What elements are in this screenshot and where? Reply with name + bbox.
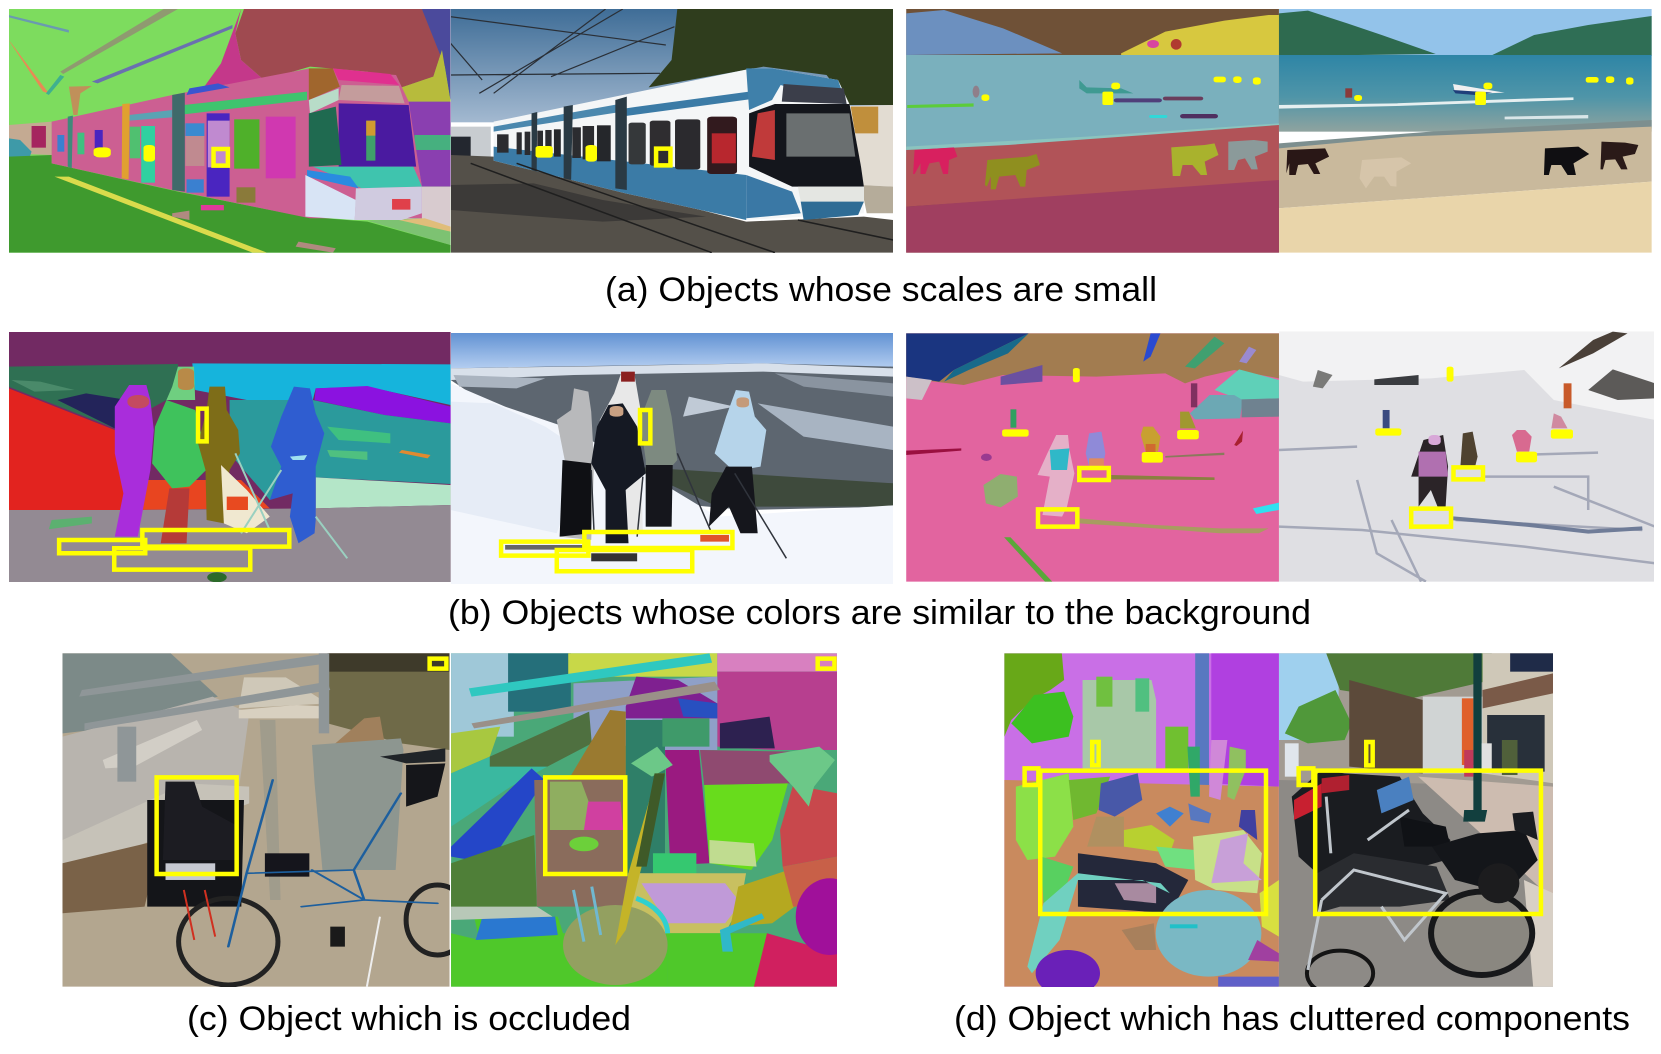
segmentation map: beach [906,9,1279,253]
photo: skiers on snowy slope [1279,332,1655,582]
panel: (b) objects whose colors are similar to the background [9,332,1655,632]
caption (a): (a) Objects whose scales are small [605,271,1157,309]
yellow marker boxes: small objects [94,76,1633,166]
segmentation map: skiers on ridge [9,332,451,582]
segmentation map: bicycle scene [451,653,864,987]
caption (d): (d) Object which has cluttered components [954,1000,1630,1038]
segmentation map: ski slope [906,333,1279,582]
yellow marker boxes: cluttered motorcycles [1025,742,1541,914]
caption (c): (c) Object which is occluded [187,1000,631,1038]
photo: beach with cows [1279,9,1652,253]
panel: (c) object which is occluded [62,653,864,1038]
segmentation map: tram [9,9,451,253]
photo: skiers on mountain top [451,332,893,584]
panel: (d) object which has cluttered components [954,653,1630,1038]
caption (b): (b) Objects whose colors are similar to the background [448,594,1311,632]
yellow marker boxes: low-contrast skis [59,367,1573,571]
photo: motorcycles on street [1279,653,1553,996]
photo: dog in bicycle basket [62,653,469,987]
segmentation map: motorcycles on street [1004,653,1279,997]
yellow marker boxes: occluded dog [157,659,834,874]
photo: blue and white tram [451,9,893,253]
panel: (a) objects whose scales are small [9,9,1652,309]
